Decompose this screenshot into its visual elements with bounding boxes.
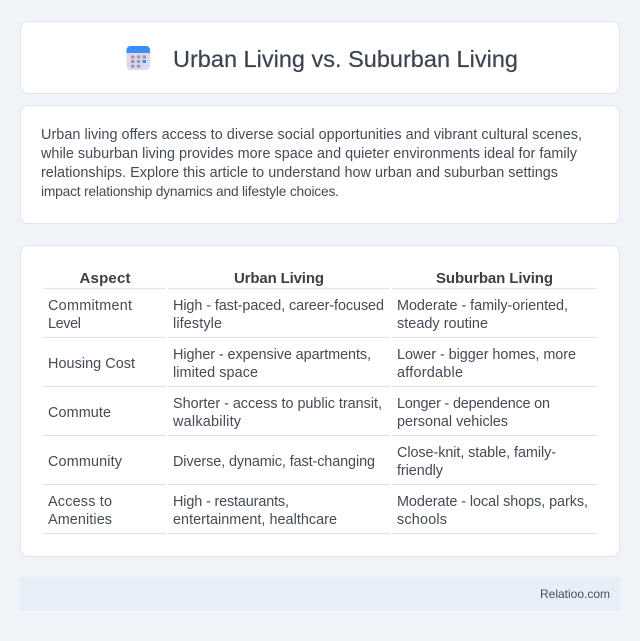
- row: access to amenities: [48, 494, 588, 528]
- table header: Suburban Living: [436, 270, 553, 287]
- row: access to amenities: Moderate - local shops, parks,: [397, 494, 588, 510]
- row: access to amenities: High - restaurants,: [173, 494, 289, 510]
- row: community: [48, 445, 556, 479]
- row: commute: [48, 396, 550, 430]
- row: community: Community: [48, 454, 123, 470]
- row: access to amenities: Access to: [48, 494, 112, 510]
- row: commute: personal vehicles: [397, 414, 508, 430]
- panel: header: [20, 22, 620, 94]
- row: housing cost: affordable: [397, 365, 463, 381]
- title: Urban Living vs. Suburban Living: [173, 46, 518, 72]
- table header: [80, 270, 553, 287]
- row: community: Diverse, dynamic, fast-changing: [173, 454, 375, 470]
- row: commute: walkability: [172, 414, 242, 430]
- footer credit: Relatioo.com: [540, 587, 610, 601]
- row: commitment level: steady routine: [397, 316, 488, 332]
- row: housing cost: Lower - bigger homes, more: [397, 347, 576, 363]
- row: commitment level: [48, 298, 568, 332]
- panel: introduction: [20, 106, 620, 224]
- footer: [20, 577, 620, 611]
- panel: comparison table: [20, 246, 620, 556]
- row: community: friendly: [397, 463, 444, 479]
- intro text: Urban living offers access to diverse social opportunities and vibrant cultural scenes,: [41, 127, 582, 143]
- table header: Urban Living: [234, 270, 324, 287]
- row: housing cost: Higher - expensive apartments,: [173, 347, 371, 363]
- row: commitment level: lifestyle: [173, 316, 222, 332]
- table header: Aspect: [80, 270, 130, 287]
- row: commute: Shorter - access to public transit,: [173, 396, 382, 412]
- row: access to amenities: schools: [397, 512, 447, 528]
- intro text: [40, 127, 582, 199]
- row: housing cost: limited space: [173, 365, 258, 381]
- row: access to amenities: entertainment, healthcare: [173, 512, 337, 528]
- row: commitment level: Commitment: [48, 298, 132, 314]
- row: access to amenities: Amenities: [48, 512, 112, 528]
- row: commitment level: High - fast-paced, career-focused: [173, 298, 384, 314]
- row: community: Close-knit, stable, family-: [397, 445, 556, 461]
- row: housing cost: [48, 347, 576, 381]
- row: commitment level: Moderate - family-oriented,: [397, 298, 568, 314]
- row: housing cost: Housing Cost: [48, 356, 135, 372]
- row: commitment level: Level: [48, 316, 81, 332]
- row: commute: Commute: [48, 405, 111, 421]
- icon: calendar: [126, 46, 150, 70]
- intro text: impact relationship dynamics and lifestyle choices.: [41, 184, 339, 199]
- intro text: while suburban living provides more space and quieter environments ideal for family: [40, 146, 578, 162]
- row: commute: Longer - dependence on: [397, 396, 550, 412]
- intro text: relationships. Explore this article to understand how urban and suburban settings: [41, 165, 558, 181]
